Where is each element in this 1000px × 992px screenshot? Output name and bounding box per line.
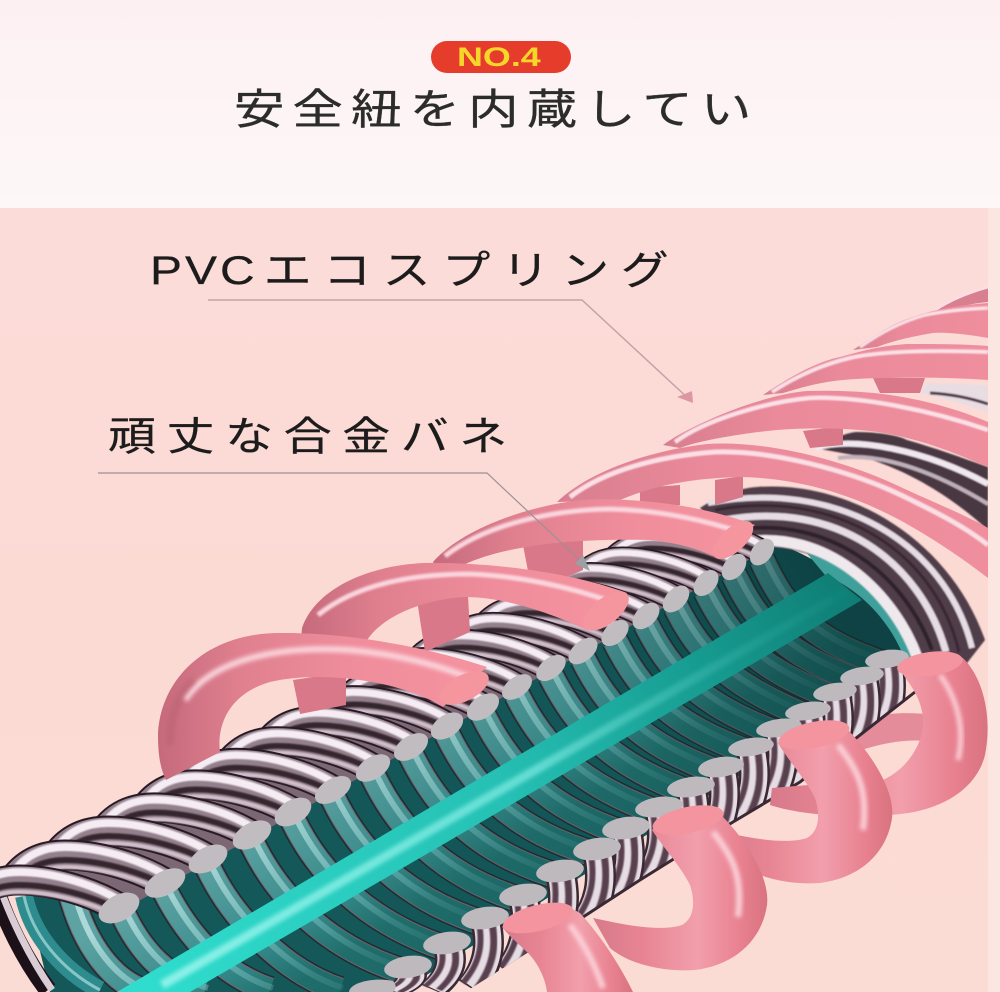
badge: NO.4 (431, 41, 571, 73)
lower cut ends (349, 647, 910, 992)
lower pink loop 3 (593, 800, 767, 970)
lower pink loop 4 (500, 897, 633, 992)
coil tube behind lower loops (857, 713, 924, 749)
label: PVC eco spring: PVCエコスプリング (150, 249, 680, 293)
right edge band (988, 208, 1000, 992)
back rim stripes (700, 486, 985, 672)
stub silhouette edge (582, 691, 916, 918)
left front ring edge (0, 882, 100, 990)
back silver stripes, upper right (815, 383, 988, 530)
lower pink background (0, 208, 1000, 992)
rosy tails emerging beneath pink coils (293, 378, 925, 714)
upper pink coil D (557, 444, 988, 578)
upper pink coil B (302, 562, 629, 640)
silver coil backing (66, 553, 750, 901)
header background (0, 0, 1000, 208)
tunnel interior (25, 540, 915, 992)
spring illustration (0, 287, 988, 992)
upper pink coil C (433, 499, 755, 564)
lower pink loop 1 (770, 648, 988, 816)
crescent inside rim (806, 552, 912, 658)
silver coils with cut ends (0, 522, 779, 930)
badge: NO.4: NO.4 (457, 41, 541, 72)
inner teal coil rings (70, 558, 890, 990)
lower pink loop 2 (738, 720, 892, 884)
leader line: alloy spring (98, 473, 590, 571)
lower silver stubs (386, 659, 896, 992)
upper pink coil H (935, 287, 988, 312)
upper pink coil A (158, 633, 494, 780)
upper cut ends (93, 534, 779, 930)
title: 安全紐を内蔵してい (234, 86, 759, 133)
label: alloy spring: 頑丈な合金バネ (108, 415, 518, 459)
upper pink coil G (853, 303, 988, 350)
upper pink coil E (663, 391, 988, 467)
interior shading (450, 548, 901, 864)
leader line: PVC eco spring (208, 300, 693, 403)
safety cord (117, 573, 862, 992)
upper pink coil F (763, 344, 988, 395)
